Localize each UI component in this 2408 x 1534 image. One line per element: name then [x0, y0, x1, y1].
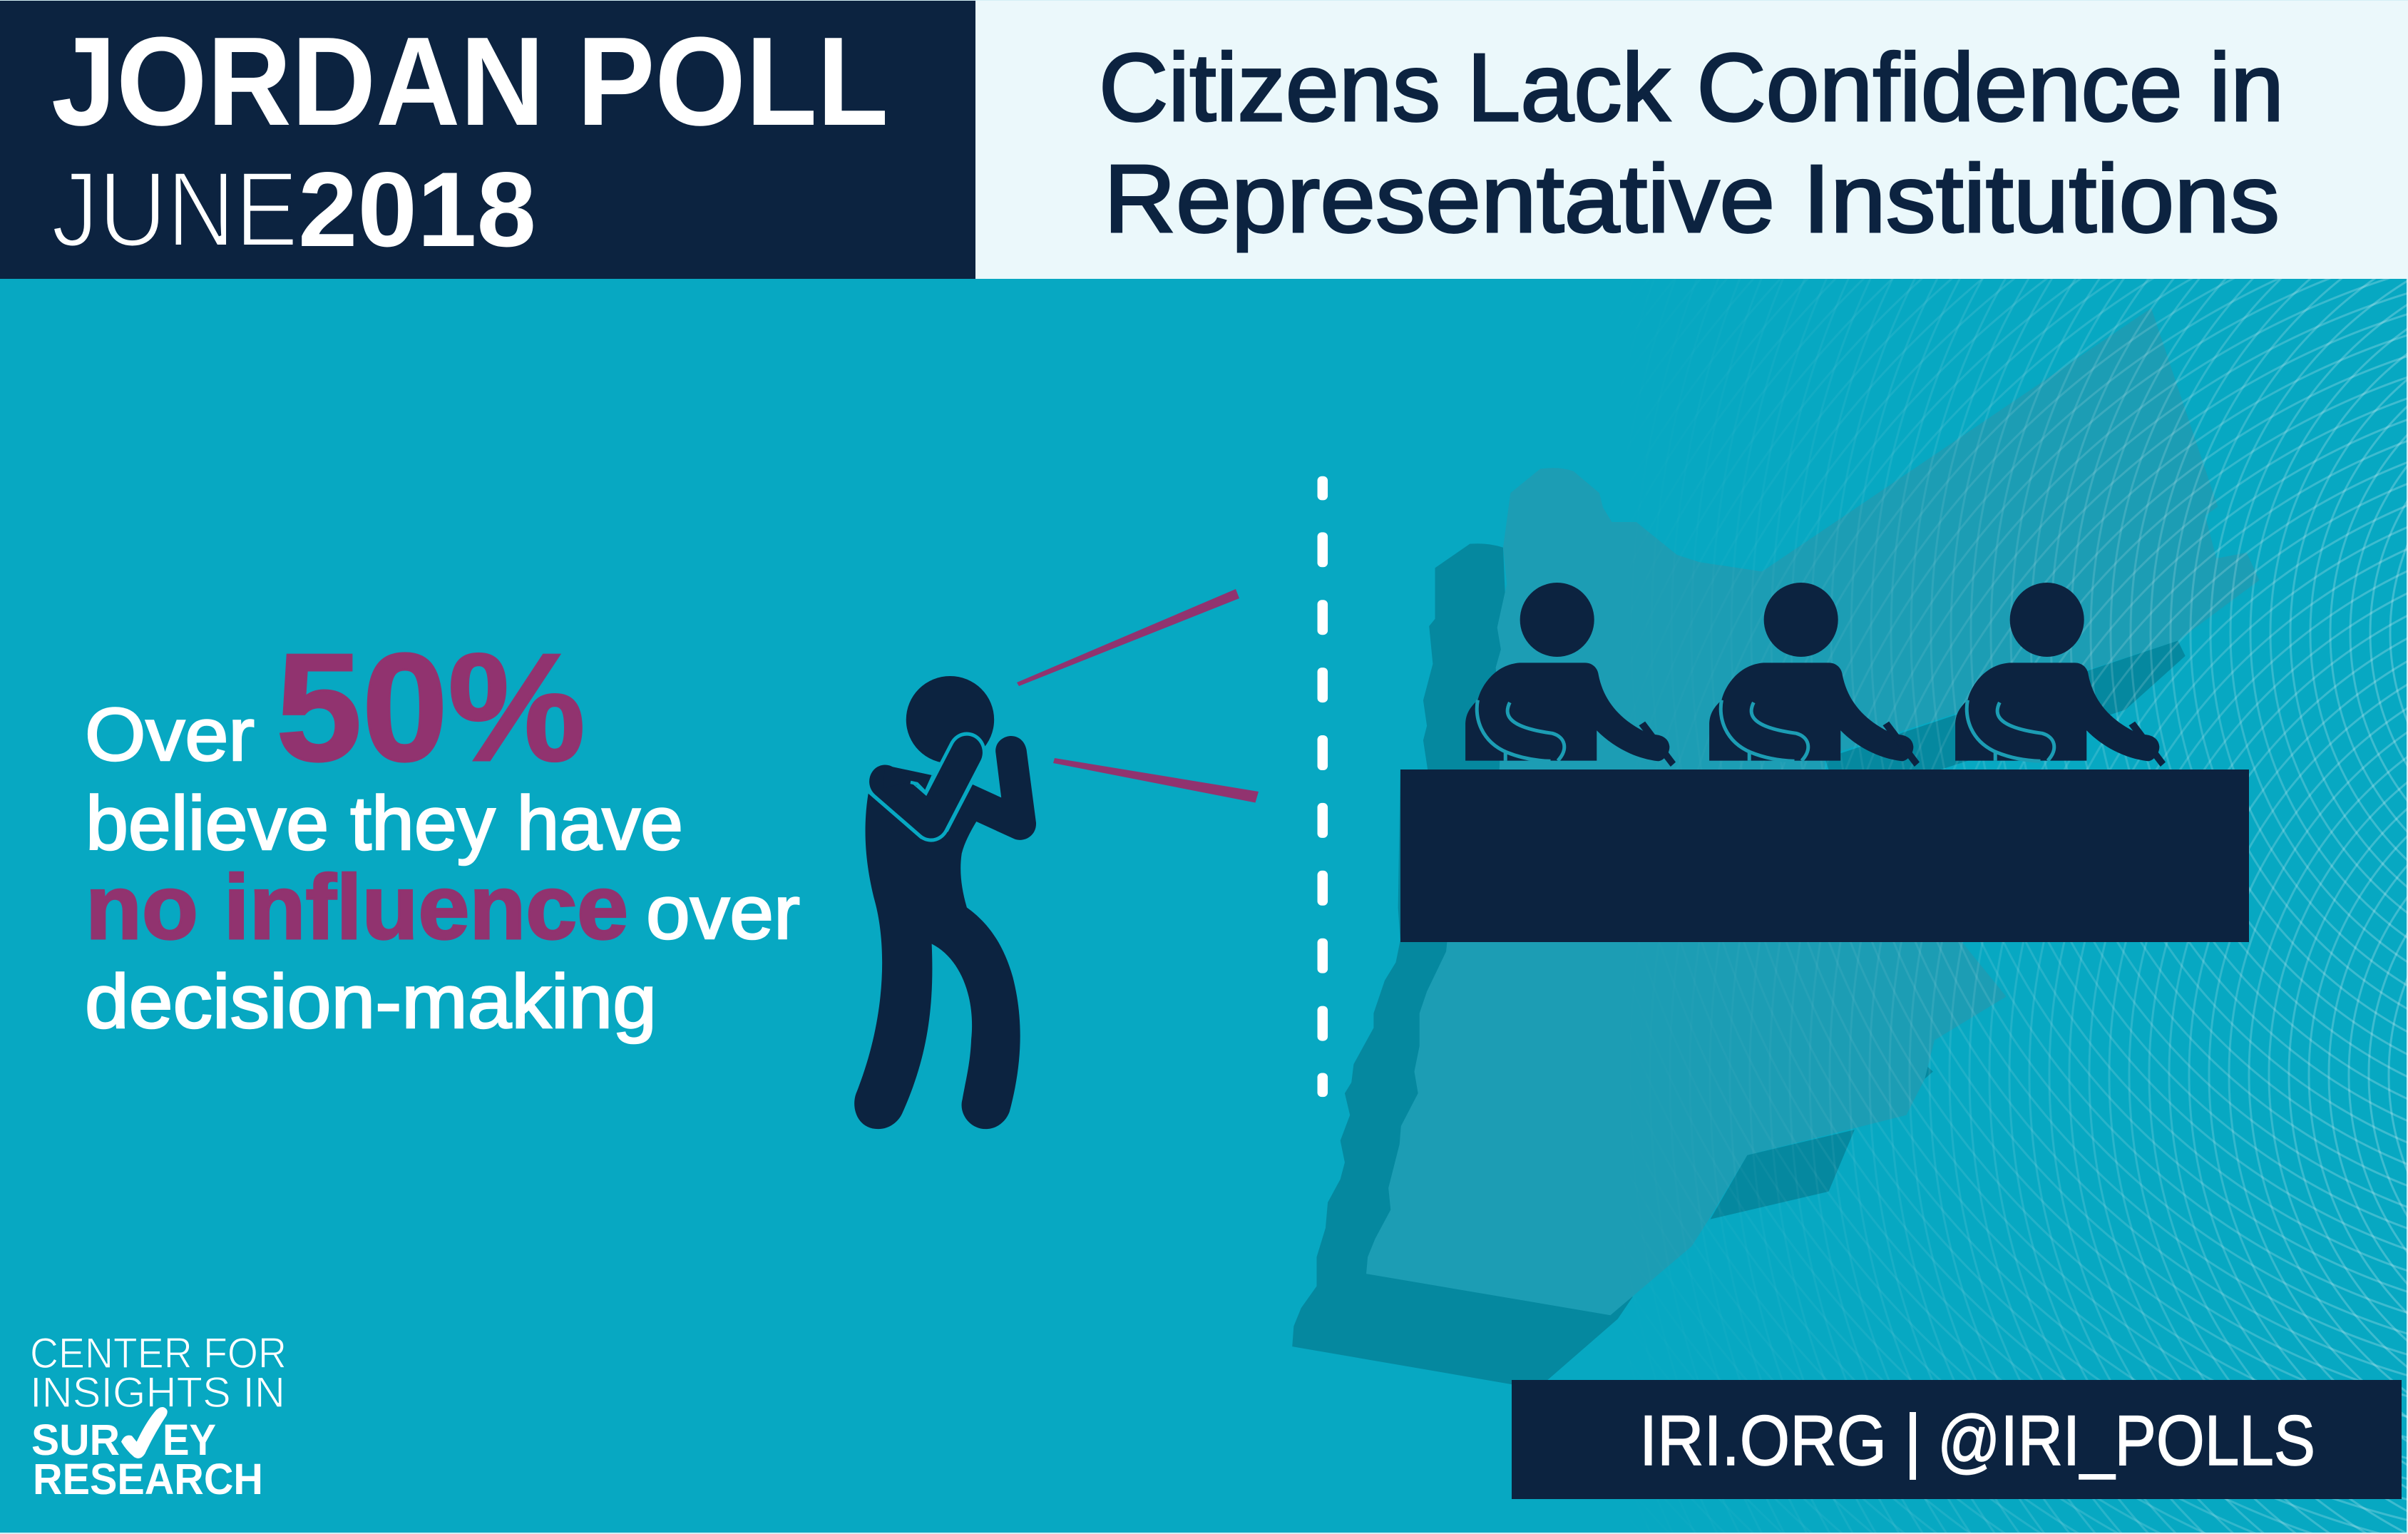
footer bar: links: @IRI_POLLS	[1937, 1401, 2315, 1480]
key finding text	[85, 621, 800, 1044]
headline	[1099, 34, 2284, 252]
header panel: headline	[975, 1, 2408, 279]
logo: Center for Insights in Survey Research: EY	[163, 1416, 216, 1464]
logo: Center for Insights in Survey Research: RESEARCH	[33, 1455, 263, 1503]
panel table	[1400, 769, 2249, 942]
no influence emphasis: no influence	[86, 857, 628, 958]
title: JORDAN POLL	[51, 11, 888, 152]
icon: check mark	[121, 1407, 168, 1458]
footer bar: links	[1512, 1380, 2402, 1499]
map of Jordan	[1292, 308, 2259, 1384]
headline: Citizens Lack Confidence in	[1099, 34, 2284, 141]
icon: seated official 2	[1709, 583, 1920, 767]
footer bar: links: IRI.ORG	[1639, 1401, 1887, 1480]
logo: Center for Insights in Survey Research: INSIGHTS IN	[30, 1369, 285, 1416]
logo: Center for Insights in Survey Research: SUR	[31, 1416, 120, 1464]
icon: seated official 1	[1465, 583, 1676, 767]
header panel: poll name	[0, 1, 975, 279]
key finding text: Over	[85, 693, 255, 777]
logo: Center for Insights in Survey Research	[30, 1329, 287, 1503]
date	[51, 149, 536, 269]
icon: person shouting	[854, 676, 1036, 1129]
key finding text: over	[646, 869, 800, 955]
date: 2018	[298, 150, 536, 269]
headline: Representative Institutions	[1104, 145, 2280, 252]
dashed divider	[1318, 476, 1328, 1097]
concentric ring pattern	[1697, 279, 2408, 1533]
50% statistic: 50%	[276, 621, 585, 793]
key finding text: decision-making	[85, 958, 657, 1044]
date: JUNE	[51, 149, 298, 269]
icon: seated official 3	[1955, 583, 2166, 767]
shout line: upper	[1017, 589, 1239, 686]
logo: Center for Insights in Survey Research: CENTER FOR	[30, 1329, 287, 1377]
key finding text: believe they have	[86, 780, 683, 866]
shout line: lower	[1053, 758, 1259, 803]
